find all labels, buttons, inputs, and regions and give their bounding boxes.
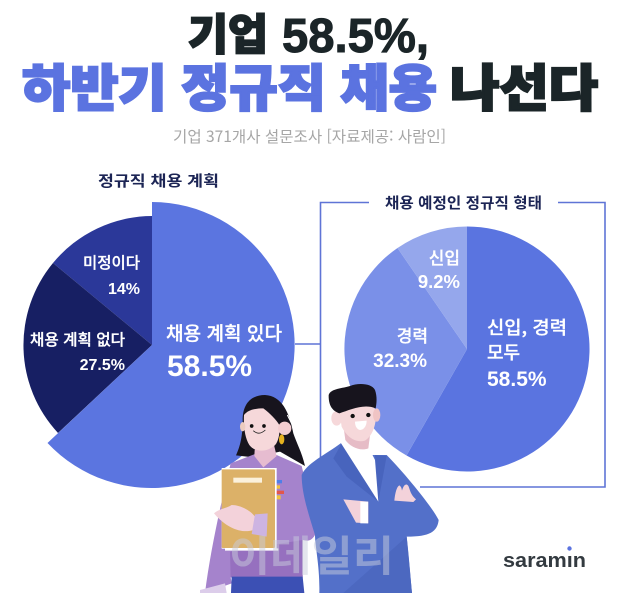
man: [302, 384, 439, 593]
label: both: 58.5%: [487, 368, 547, 391]
label: plan: [166, 319, 283, 383]
title: [22, 1, 598, 121]
label: experienced: 32.3%: [373, 351, 427, 372]
slice: undecided 14%: [53, 216, 152, 345]
shirt: [340, 437, 378, 502]
neck: [254, 445, 277, 467]
neck: [344, 430, 371, 449]
eyes and mouth: [250, 424, 253, 428]
label: no plan: 채용 계획 없다: [30, 328, 125, 350]
label: undecided: 미정이다: [83, 251, 140, 273]
skirt: [231, 577, 304, 593]
label: plan: 58.5%: [167, 350, 252, 383]
title: 나선다: [450, 49, 598, 121]
earring: [279, 434, 284, 444]
label: no plan: [30, 328, 125, 374]
jacket: [205, 454, 315, 593]
label: new: 신입: [429, 244, 460, 269]
label: new: 9.2%: [418, 271, 460, 292]
hair: [329, 384, 377, 413]
label: experienced: 경력: [397, 322, 428, 347]
heading: hiring type: 채용 예정인 정규직 형태: [385, 192, 542, 213]
sticky tabs: [274, 480, 282, 483]
folder: [222, 468, 277, 549]
slice: both 58.5%: [406, 226, 590, 472]
slice: plan 58.5%: [48, 202, 295, 488]
label: both: 신입, 경력: [487, 314, 567, 340]
frame: hiring type box: [295, 202, 605, 487]
illustration: woman and man: [200, 384, 439, 593]
suit: [302, 443, 439, 593]
title: 하반기 정규직 채용: [22, 49, 437, 121]
slice: experienced 32.3%: [344, 248, 467, 456]
label: experienced: [373, 322, 428, 372]
logo: saramin: saramın: [503, 550, 586, 572]
watermark: 이데일리: [229, 523, 394, 584]
hair: [236, 395, 305, 466]
subtitle: 기업 371개사 설문조사 [자료제공: 사람인]: [173, 125, 446, 147]
heading: hiring plan: 정규직 채용 계획: [98, 170, 219, 191]
face: [339, 403, 376, 441]
forearm and hand: [343, 499, 368, 523]
label: no plan: 27.5%: [80, 357, 125, 374]
hand and cuff: [214, 505, 255, 531]
pie chart: hiring type: [344, 226, 590, 472]
label: both: [487, 314, 567, 391]
label: both: 모두: [487, 339, 520, 365]
label: plan: 채용 계획 있다: [166, 319, 283, 346]
label: new: [418, 244, 460, 292]
hem lining: [200, 583, 227, 593]
title: 58.5%,: [282, 10, 429, 63]
face: [244, 408, 280, 451]
slice: no plan 27.5%: [23, 263, 152, 433]
slice: new 9.2%: [398, 226, 467, 349]
lapel shade: [333, 443, 378, 502]
label: undecided: [83, 251, 140, 298]
eyes: [350, 414, 355, 418]
title: 기업: [188, 1, 268, 63]
pie chart: hiring plan: [23, 202, 295, 488]
woman: [200, 395, 315, 593]
mouth highlight: [355, 421, 367, 430]
label: undecided: 14%: [108, 281, 140, 298]
